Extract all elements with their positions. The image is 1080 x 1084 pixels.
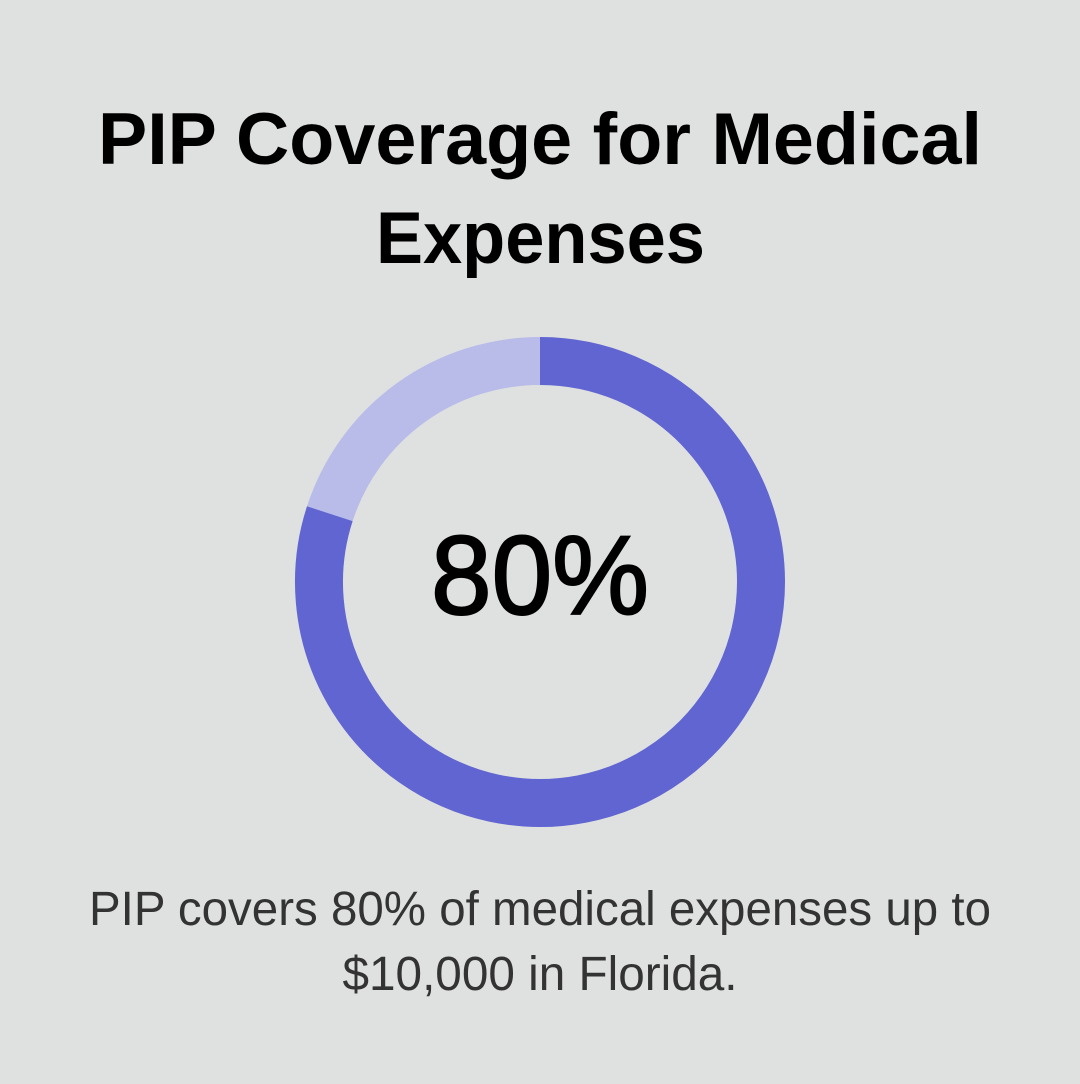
remaining 20 percent segment: [330, 361, 540, 514]
title: Expenses: [376, 198, 705, 279]
covered 80 percent segment: [319, 361, 761, 803]
caption: [89, 883, 991, 1001]
caption: PIP covers 80% of medical expenses up to: [89, 883, 991, 936]
title: PIP Coverage for Medical: [98, 99, 982, 180]
title: [98, 99, 982, 279]
donut chart: 80 percent: [319, 361, 761, 803]
caption: $10,000 in Florida.: [342, 948, 738, 1001]
center value: 80%: [431, 513, 649, 638]
